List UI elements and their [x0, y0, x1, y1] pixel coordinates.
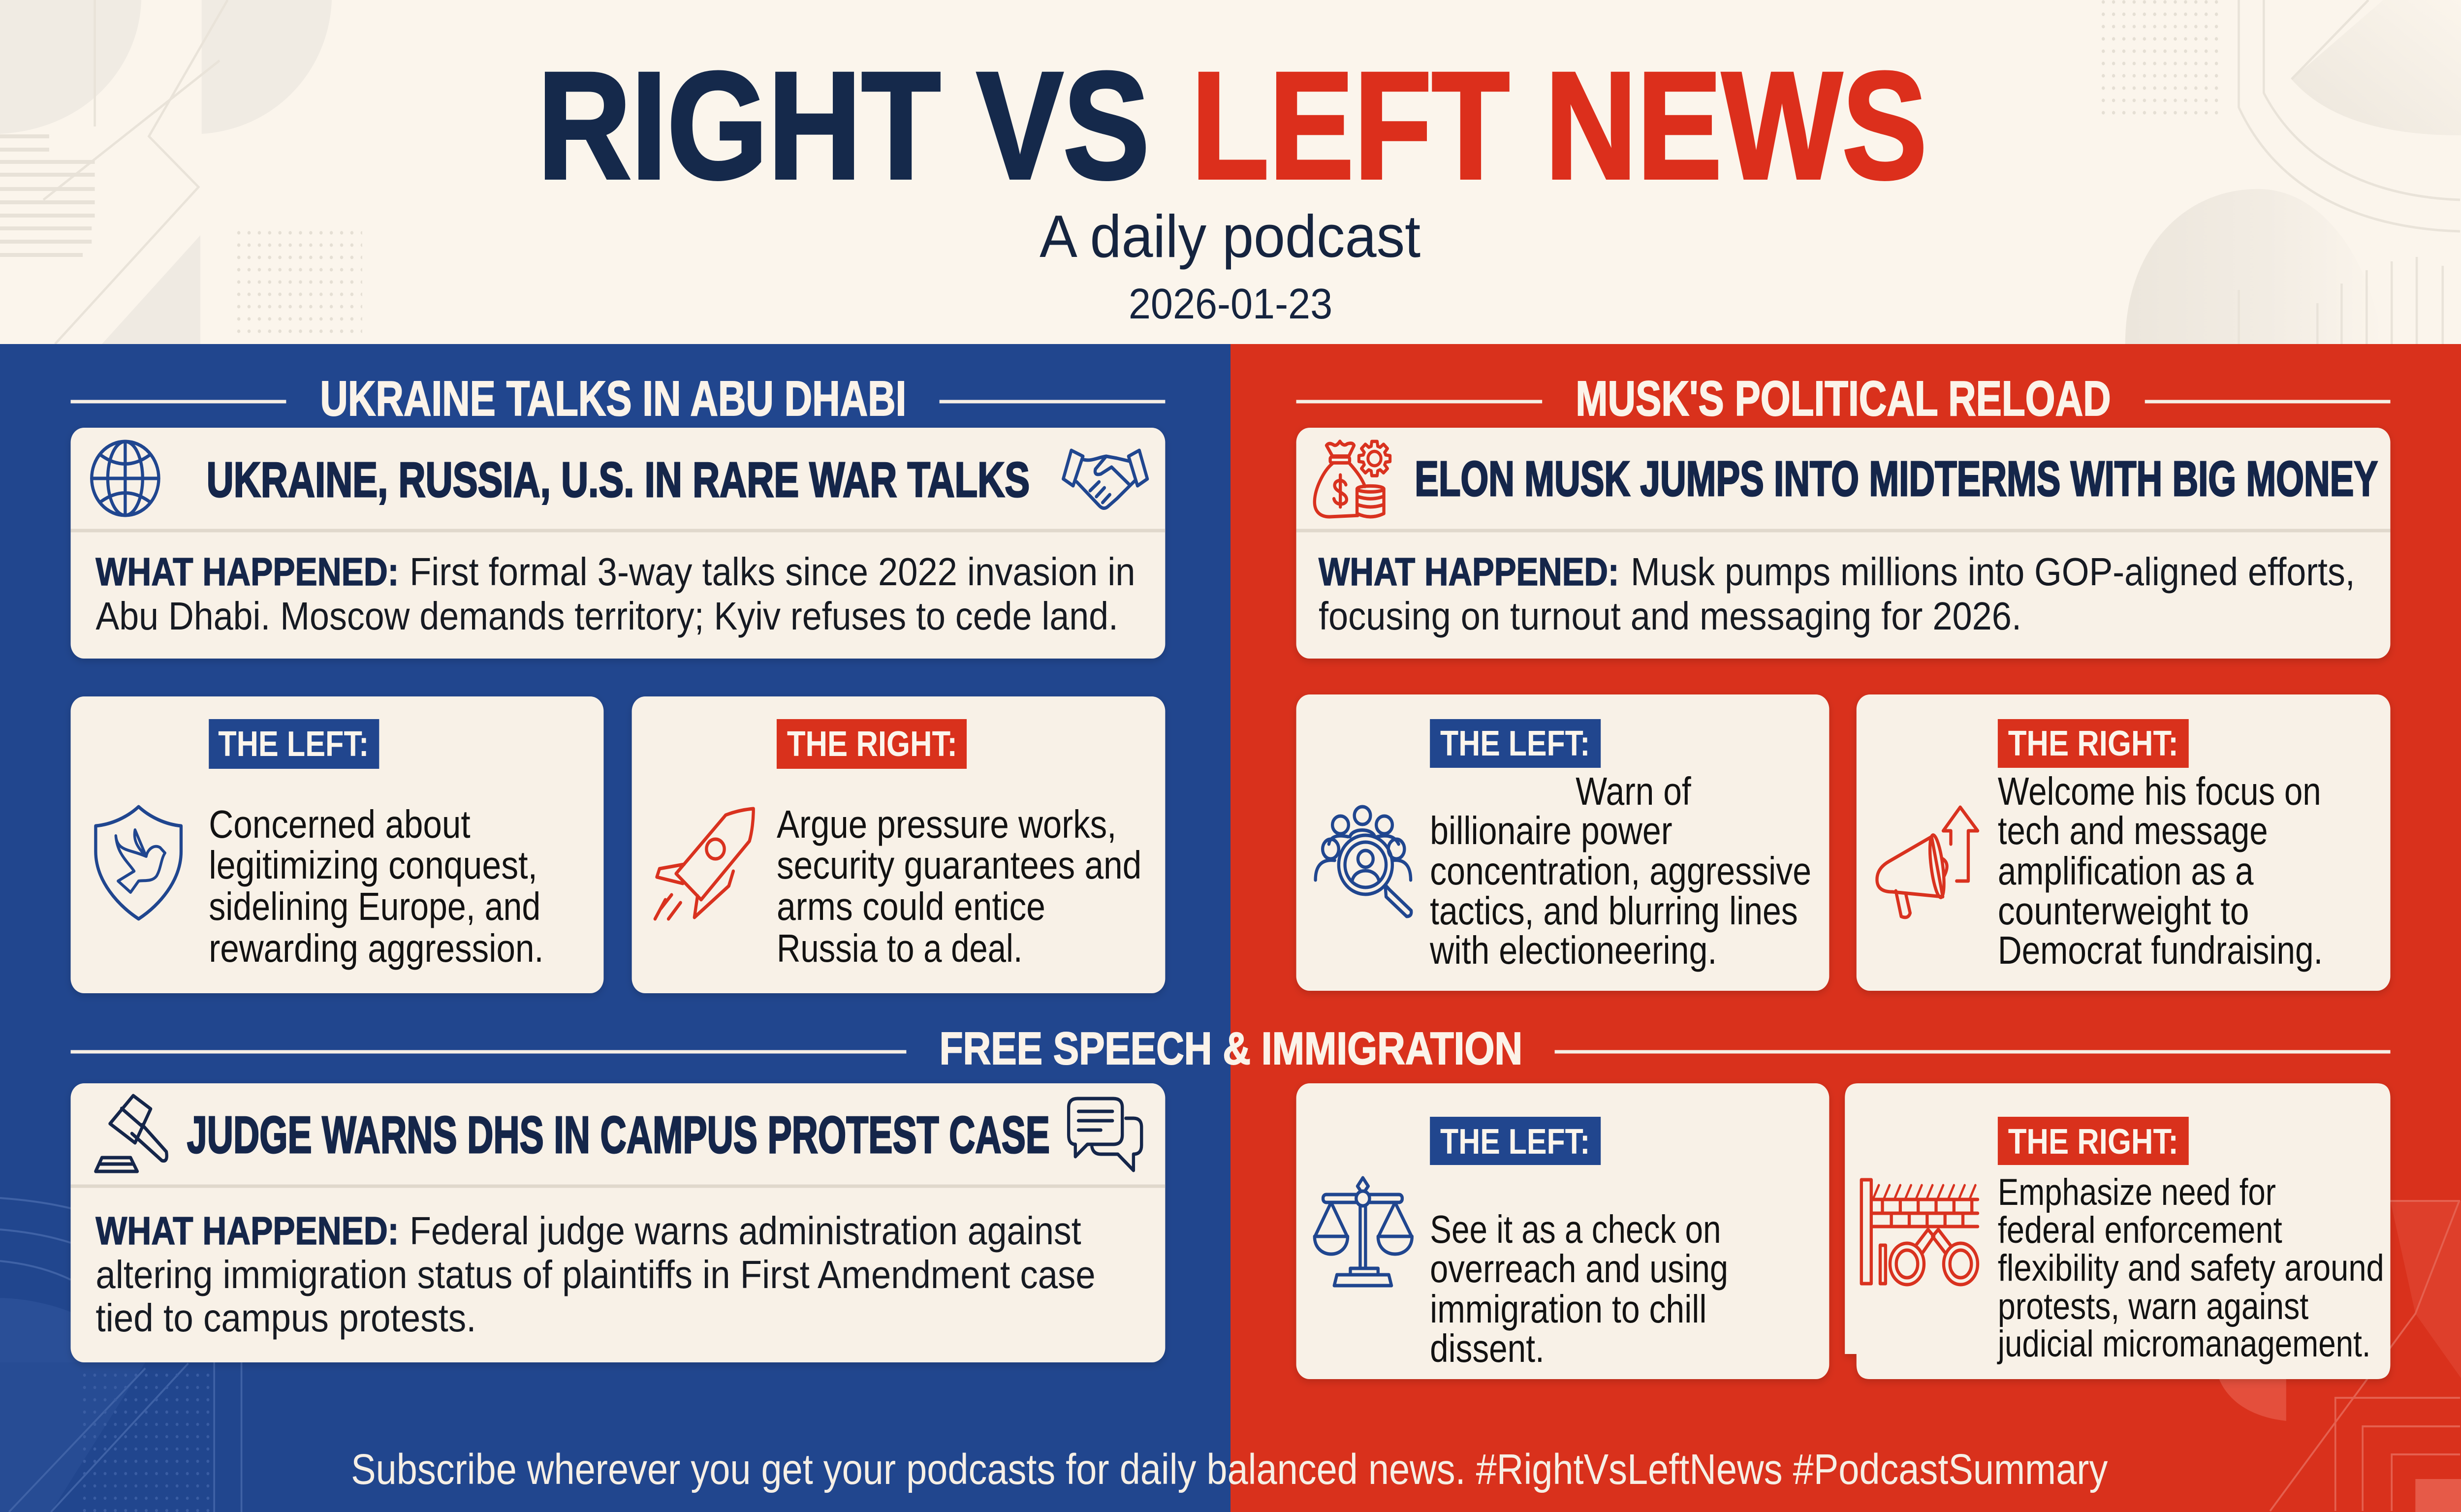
- left view text: sidelining Europe, and: [209, 885, 540, 929]
- right view text: [777, 803, 1141, 971]
- card: Musk the right: [1857, 694, 2390, 991]
- what happened text: [95, 550, 1136, 638]
- right view text: arms could entice: [777, 885, 1045, 929]
- icon: shield with dove: [95, 807, 181, 919]
- card title: UKRAINE, RUSSIA, U.S. IN RARE WAR TALKS: [207, 453, 1030, 507]
- card: judge the right: [1845, 1083, 2390, 1379]
- icon: handshake: [1063, 450, 1147, 508]
- left view text: Warn of: [1576, 770, 1691, 814]
- icon: globe: [92, 441, 158, 515]
- tag: the right: THE RIGHT:: [787, 724, 957, 764]
- left view text: [1430, 1208, 1728, 1371]
- what happened text: Musk pumps millions into GOP-aligned efforts,: [1631, 550, 2355, 594]
- right view text: tech and message: [1998, 809, 2268, 853]
- title: RIGHT VS: [537, 40, 1150, 211]
- left view text: tactics, and blurring lines: [1430, 889, 1798, 933]
- right view text: amplification as a: [1998, 850, 2254, 893]
- footer call to action: Subscribe wherever you get your podcasts for daily balanced news. #RightVsLeftNews #PodcastSummary: [351, 1445, 2108, 1493]
- right view text: protests, warn against: [1998, 1286, 2308, 1327]
- left view text: [1429, 770, 1811, 973]
- card: Ukraine what happened: [71, 428, 1165, 659]
- heading: Ukraine talks in Abu Dhabi: UKRAINE TALKS IN ABU DHABI: [320, 372, 906, 426]
- what happened text: focusing on turnout and messaging for 2026.: [1319, 595, 2021, 638]
- left view text: Concerned about: [209, 803, 471, 847]
- card: Ukraine the left: [71, 696, 603, 993]
- header background: [0, 0, 2461, 344]
- card: judge the left: [1296, 1083, 1829, 1379]
- card: judge what happened: [71, 1083, 1165, 1362]
- right view text: Argue pressure works,: [777, 803, 1116, 847]
- left view text: dissent.: [1430, 1327, 1545, 1371]
- left view text: legitimizing conquest,: [209, 844, 537, 887]
- left view text: rewarding aggression.: [209, 927, 544, 971]
- icon: megaphone and arrow: [1877, 807, 1978, 917]
- tag: the right: THE RIGHT:: [2008, 724, 2178, 763]
- what happened text: altering immigration status of plaintiffs in First Amendment case: [95, 1253, 1096, 1297]
- title: LEFT NEWS: [1191, 40, 1927, 211]
- card: Ukraine the right: [632, 696, 1165, 993]
- left view text: See it as a check on: [1430, 1208, 1721, 1252]
- panel: blue left background: [0, 344, 1230, 1512]
- icon: scales of justice: [1315, 1178, 1412, 1286]
- icon: fence and handcuffs: [1862, 1180, 1978, 1285]
- date: 2026-01-23: [1129, 280, 1332, 328]
- left view text: [209, 803, 544, 971]
- what happened text: [1319, 550, 2355, 638]
- tag: the left: THE LEFT:: [1440, 1122, 1590, 1162]
- card title: JUDGE WARNS DHS IN CAMPUS PROTEST CASE: [187, 1106, 1050, 1164]
- right view text: judicial micromanagement.: [1997, 1323, 2370, 1365]
- header decoration: left: [0, 0, 362, 344]
- right view text: flexibility and safety around: [1998, 1247, 2384, 1289]
- right view text: Welcome his focus on: [1998, 770, 2321, 814]
- what happened text: WHAT HAPPENED:: [95, 550, 399, 594]
- right view text: [1998, 770, 2323, 973]
- title: [537, 40, 1927, 211]
- what happened text: WHAT HAPPENED:: [1319, 550, 1619, 594]
- tag: the left: THE LEFT:: [1440, 724, 1590, 763]
- left view text: with electioneering.: [1429, 929, 1717, 973]
- heading: Free speech and immigration: FREE SPEECH & IMMIGRATION: [940, 1023, 1522, 1074]
- subtitle: A daily podcast: [1040, 202, 1420, 270]
- icon: money bag and gear: [1315, 441, 1390, 517]
- tag: the right: THE RIGHT:: [2008, 1122, 2178, 1162]
- what happened text: tied to campus protests.: [95, 1296, 476, 1340]
- right view text: Russia to a deal.: [777, 927, 1023, 971]
- tag: the left: THE LEFT:: [218, 724, 369, 764]
- right view text: counterweight to: [1998, 889, 2249, 933]
- what happened text: Federal judge warns administration against: [410, 1209, 1081, 1253]
- right view text: [1997, 1171, 2384, 1365]
- icon: people under magnifier: [1316, 807, 1411, 916]
- left view text: overreach and using: [1430, 1247, 1728, 1291]
- left view text: immigration to chill: [1430, 1288, 1706, 1331]
- what happened text: WHAT HAPPENED:: [95, 1209, 399, 1253]
- icon: chat bubbles: [1069, 1099, 1141, 1170]
- right view text: security guarantees and: [777, 844, 1141, 887]
- panel: red right background: [1230, 344, 2461, 1512]
- icon: gavel: [95, 1096, 167, 1171]
- right view text: Emphasize need for: [1998, 1171, 2276, 1213]
- left view text: concentration, aggressive: [1430, 850, 1811, 893]
- what happened text: First formal 3-way talks since 2022 invasion in: [410, 550, 1136, 594]
- right view text: Democrat fundraising.: [1998, 929, 2323, 973]
- right view text: federal enforcement: [1998, 1209, 2282, 1251]
- card: Musk what happened: [1296, 428, 2390, 659]
- left view text: billionaire power: [1430, 809, 1672, 853]
- header decoration: right: [2102, 0, 2461, 344]
- what happened text: [95, 1209, 1096, 1340]
- heading: Musk's political reload: MUSK'S POLITICAL RELOAD: [1576, 372, 2111, 426]
- card: Musk the left: [1296, 694, 1829, 991]
- what happened text: Abu Dhabi. Moscow demands territory; Kyiv refuses to cede land.: [95, 595, 1118, 638]
- icon: rocket: [655, 809, 754, 919]
